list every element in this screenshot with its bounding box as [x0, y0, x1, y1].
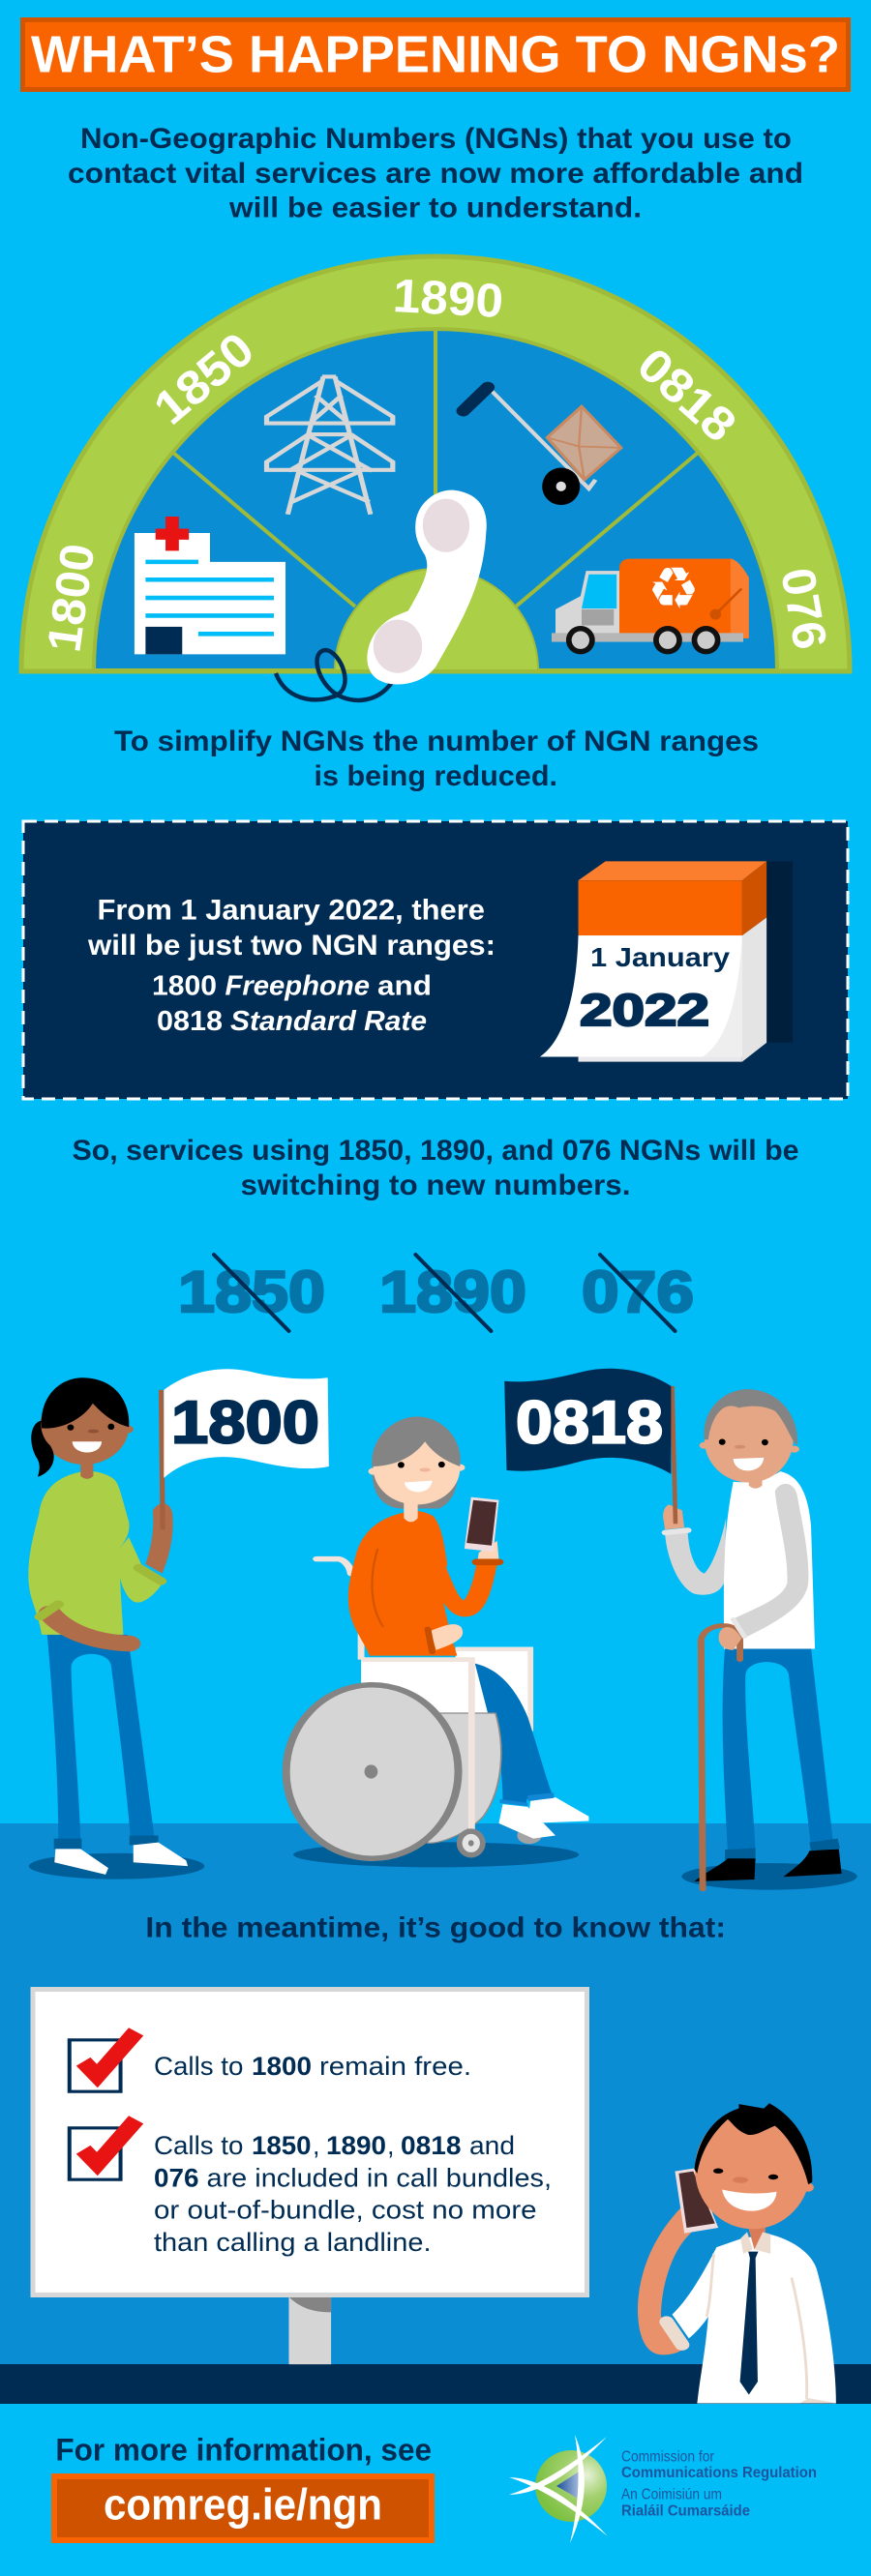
crossed-out numbers: 1890 — [379, 1259, 526, 1324]
text: two NGN ranges — [87, 894, 496, 1037]
panel: 1 January 2022 dashed box — [23, 821, 848, 1099]
logo text: Commission for — [621, 2448, 715, 2465]
logo text: An Coimisiún um — [621, 2487, 722, 2503]
title banner: WHAT’S HAPPENING TO NGNs? — [31, 25, 840, 83]
call to action — [54, 2433, 432, 2540]
text: calls to other NGNs: or out-of-bundle, cost no more — [154, 2196, 537, 2225]
text: calls to other NGNs: and — [469, 2131, 515, 2160]
intro text: will be easier to understand. — [228, 192, 642, 224]
text: two NGN ranges: 0818 — [157, 1006, 223, 1037]
dial label 1850: 1850 — [144, 323, 264, 435]
text: calls to other NGNs: than calling a landline. — [154, 2228, 431, 2257]
flag: 0818: 0818 — [516, 1389, 663, 1456]
text: calls to other NGNs: 076 — [154, 2163, 199, 2192]
text: calls to other NGNs: 1850 — [252, 2131, 312, 2160]
crossed-out numbers: 076 — [582, 1259, 694, 1324]
text: two NGN ranges: From 1 January 2022, there — [97, 894, 485, 927]
text: calls to 1800 — [154, 2052, 471, 2081]
icon: electricity pylon — [267, 376, 393, 515]
text: simplify NGNs: To simplify NGNs the number of NGN ranges — [114, 725, 759, 757]
text: simplify NGNs — [114, 725, 759, 792]
person: man with 0818 flag and cane — [504, 1369, 857, 1890]
intro text: contact vital services are now more affordable and — [68, 158, 803, 190]
flag: 1800 — [164, 1369, 329, 1478]
icon: checkbox 2 — [70, 2119, 136, 2179]
sign post — [288, 2297, 331, 2364]
gauge: NGN number dial — [21, 256, 850, 700]
icon: telephone handset — [367, 490, 487, 685]
text: calls to other NGNs: Calls to — [154, 2131, 243, 2160]
icon: recycling truck: ♻ — [647, 555, 700, 623]
panel: information sign — [33, 1989, 586, 2295]
icon: recycling truck — [552, 555, 749, 654]
text: calls to other NGNs: are included in call bundles, — [207, 2163, 552, 2192]
dial label 1800: 1800 — [38, 541, 105, 655]
logo text: Rialáil Cumarsáide — [621, 2503, 750, 2520]
person: woman with 1800 flag — [28, 1369, 329, 1880]
text: two NGN ranges: Standard Rate — [230, 1006, 427, 1037]
text: calls to other NGNs: 0818 — [401, 2131, 461, 2160]
logo text — [621, 2448, 817, 2520]
icon: hand truck with parcel — [464, 387, 621, 505]
dial label 1890: 1890 — [392, 270, 504, 328]
text: calls to 1800: 1800 — [252, 2052, 312, 2081]
text: switching to new numbers: So, services using 1850, 1890, and 076 NGNs will be — [72, 1135, 799, 1167]
button: comreg.ie/ngn: comreg.ie/ngn — [104, 2480, 382, 2530]
text: two NGN ranges: 1800 — [152, 970, 217, 1001]
intro text — [68, 123, 803, 224]
text: two NGN ranges: Freephone — [225, 970, 370, 1001]
flag: 0818 — [504, 1369, 671, 1474]
text: switching to new numbers — [72, 1135, 799, 1201]
text: two NGN ranges: will be just two NGN ranges: — [87, 930, 496, 962]
icon: tear-off calendar — [540, 861, 793, 1062]
dial label 076: 076 — [770, 564, 836, 653]
person: man on phone — [638, 2103, 836, 2404]
icon: tear-off calendar: 1 January — [590, 942, 730, 972]
icon: tear-off calendar: 2022 — [580, 985, 709, 1035]
dial label 0818: 0818 — [627, 339, 745, 453]
text: simplify NGNs: is being reduced. — [314, 760, 557, 792]
text: calls to 1800: remain free. — [319, 2052, 471, 2081]
flag: 1800: 1800 — [171, 1389, 319, 1456]
text: switching to new numbers: switching to new numbers. — [240, 1170, 631, 1201]
heading: in the meantime: In the meantime, it’s good to know that: — [145, 1912, 726, 1944]
crossed-out numbers — [178, 1255, 694, 1331]
button: comreg.ie/ngn — [54, 2476, 432, 2540]
text: calls to other NGNs: , — [313, 2131, 320, 2160]
crossed-out numbers: 1850 — [178, 1259, 325, 1324]
icon: phone cord — [276, 650, 395, 700]
intro text: Non-Geographic Numbers (NGNs) that you use to — [80, 123, 792, 155]
person: woman in wheelchair — [286, 1417, 588, 1867]
text: calls to 1800: Calls to — [154, 2052, 243, 2081]
icon: checkbox 1 — [70, 2031, 136, 2091]
icon: hospital — [135, 517, 285, 654]
text: calls to other NGNs — [154, 2131, 552, 2257]
call to action: For more information, see — [55, 2433, 432, 2468]
logo text: Communications Regulation — [621, 2465, 817, 2481]
text: two NGN ranges: and — [377, 970, 432, 1001]
text: calls to other NGNs: , — [387, 2131, 395, 2160]
text: calls to other NGNs: 1890 — [326, 2131, 386, 2160]
logo: ComReg — [509, 2435, 817, 2543]
